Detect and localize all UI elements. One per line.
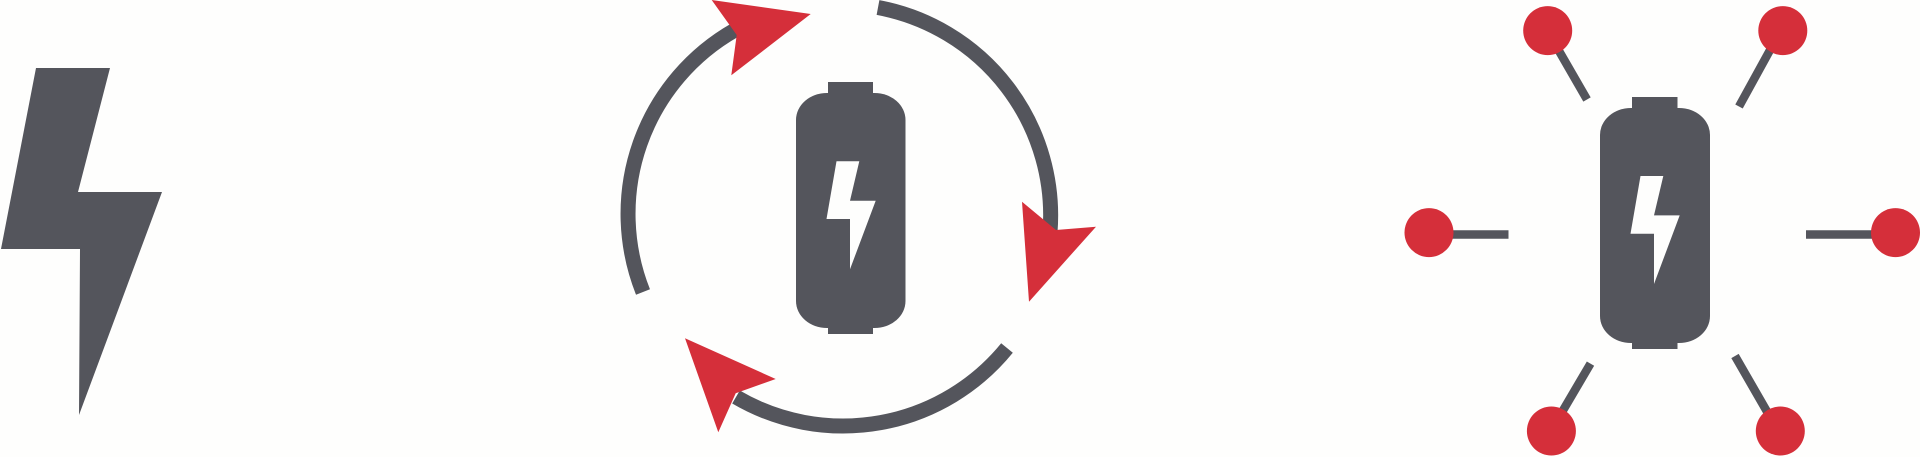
arc: bottom	[736, 348, 1007, 426]
icon: battery powering connected nodes	[1404, 6, 1920, 455]
icon: lightning bolt	[1, 68, 162, 415]
arrowhead: top	[712, 0, 811, 75]
arrowhead: bottom left	[685, 338, 776, 432]
arrowhead: right	[1022, 202, 1096, 302]
arc: top right	[878, 8, 1051, 232]
arc: left	[628, 30, 735, 292]
icon: rechargeable battery cycle	[628, 0, 1096, 432]
battery with bolt	[796, 82, 906, 334]
node circles	[1404, 6, 1920, 455]
connector lines	[1440, 41, 1885, 424]
battery with bolt	[1600, 97, 1710, 349]
